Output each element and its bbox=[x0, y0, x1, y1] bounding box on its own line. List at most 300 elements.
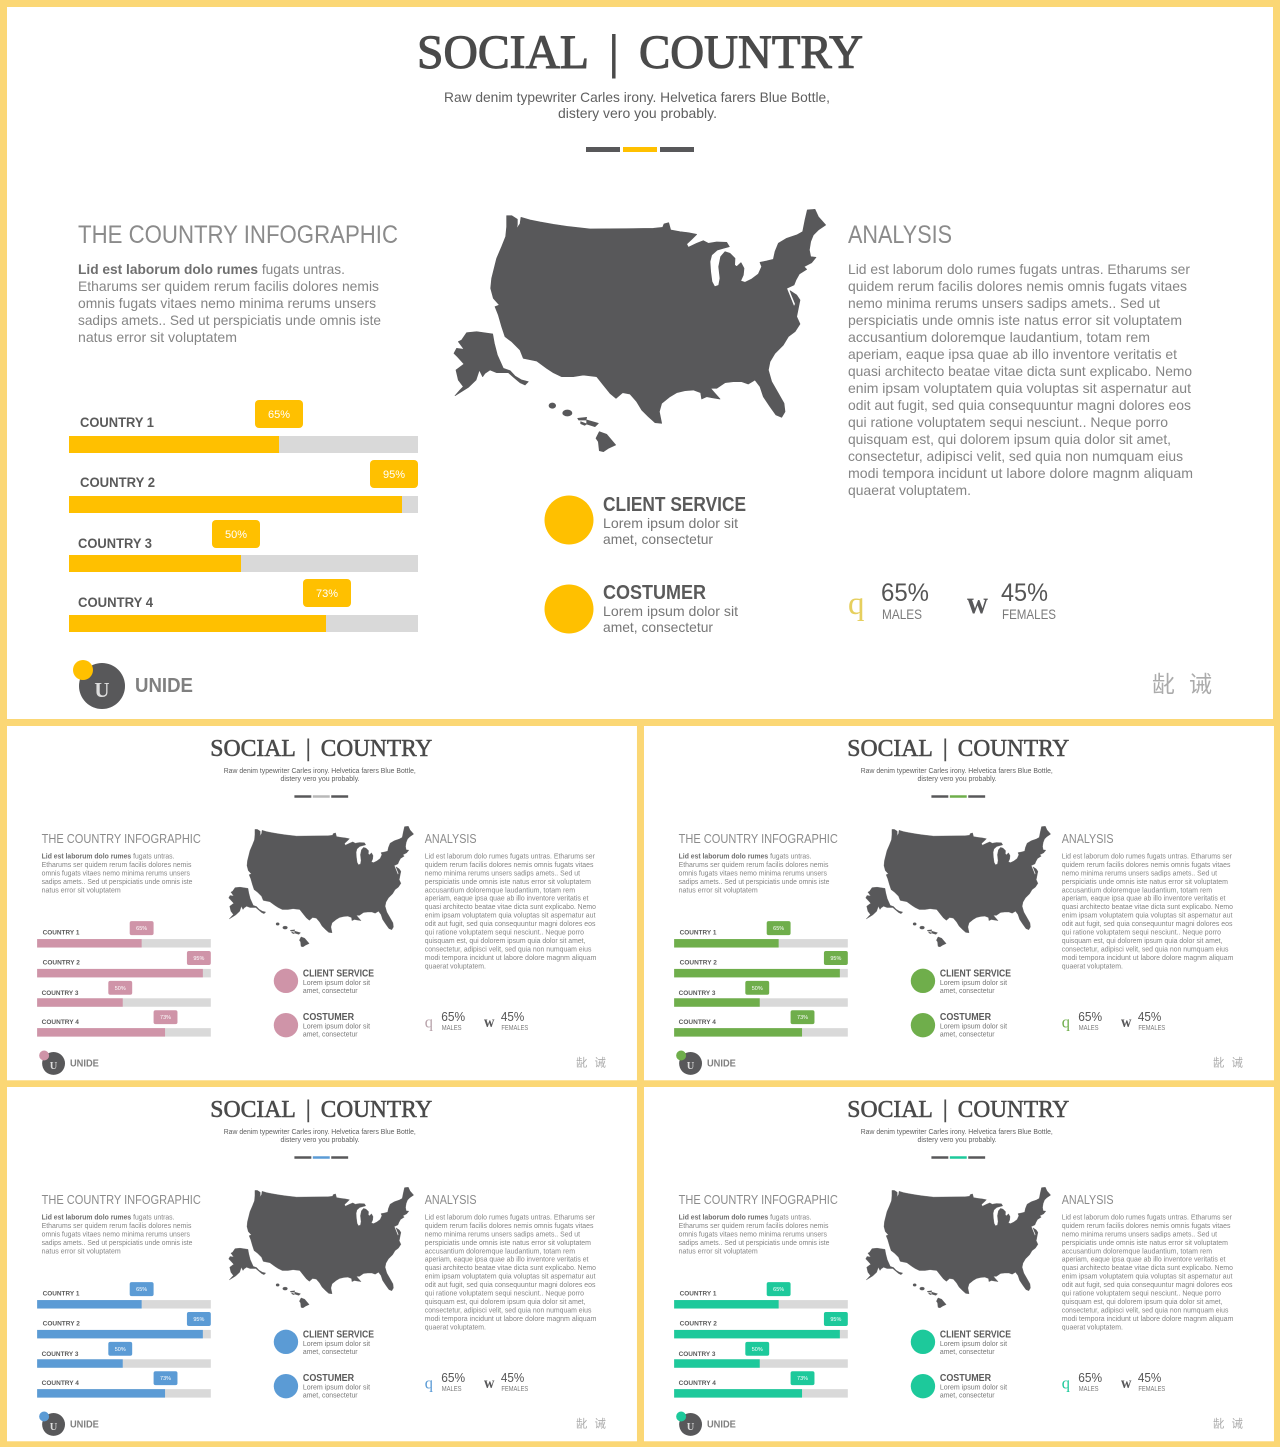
intro text: natus error sit voluptatem bbox=[679, 1248, 758, 1255]
legend: costumer: Lorem ipsum dolor sit bbox=[940, 1385, 1007, 1392]
bar: country 3 bbox=[37, 1342, 211, 1368]
map: united states bbox=[454, 209, 826, 452]
legend: client service: Lorem ipsum dolor sit bbox=[603, 515, 738, 531]
analysis text: consectetur, adipisci velit, sed quia non numquam eius bbox=[425, 947, 592, 954]
heading: analysis: ANALYSIS bbox=[1062, 832, 1114, 846]
footer glyphs right: 诫 bbox=[1231, 1417, 1243, 1430]
intro text: Etharums ser quidem rerum facilis dolores nemis bbox=[78, 278, 379, 294]
analysis text: enim ipsam voluptatem quia voluptas sit aspernatur aut bbox=[1062, 913, 1233, 920]
analysis text: consectetur, adipisci velit, sed quia non numquam eius bbox=[425, 1308, 592, 1315]
intro text: natus error sit voluptatem bbox=[42, 1248, 121, 1255]
analysis text: quidem rerum facilis dolores nemis omnis fugats vitaes bbox=[1062, 862, 1231, 869]
footer glyphs: 龀 bbox=[1213, 1416, 1224, 1430]
stat: females bbox=[484, 1010, 529, 1032]
bar: country 3: COUNTRY 3 bbox=[78, 536, 152, 551]
bar: country 1: 65% bbox=[268, 409, 290, 421]
analysis text: nemo minima rerums unsers sadips amets.. Sed ut bbox=[1062, 1231, 1217, 1238]
analysis text: enim ipsam voluptatem quia voluptas sit aspernatur aut bbox=[1062, 1274, 1233, 1281]
bar: country 3: COUNTRY 3 bbox=[679, 1351, 716, 1358]
bar: country 4: 73% bbox=[316, 588, 338, 600]
analysis text: odit aut fugit, sed quia consequuntur magni dolores eos bbox=[848, 397, 1191, 413]
legend: client service: CLIENT SERVICE bbox=[940, 968, 1011, 979]
bar: country 2 bbox=[37, 1312, 211, 1338]
intro text: omnis fugats vitaes nemo minima rerums unsers bbox=[679, 870, 827, 877]
footer glyphs: 龀 bbox=[576, 1055, 587, 1069]
title divider bbox=[294, 795, 348, 798]
analysis text: quisquam est, qui dolorem ipsum quia dolor sit amet, bbox=[425, 938, 586, 945]
intro text: natus error sit voluptatem bbox=[42, 887, 121, 894]
legend: client service: Lorem ipsum dolor sit bbox=[940, 980, 1007, 987]
intro text: sadips amets.. Sed ut perspiciatis unde omnis iste bbox=[42, 879, 193, 886]
legend: costumer: Lorem ipsum dolor sit bbox=[603, 603, 738, 619]
stat: females: 45% bbox=[1138, 1371, 1161, 1385]
legend: costumer bbox=[274, 1012, 370, 1039]
subtitle: distery vero you probably. bbox=[917, 1137, 997, 1144]
legend: costumer: amet, consectetur bbox=[940, 1393, 995, 1400]
bar: country 1: COUNTRY 1 bbox=[680, 1291, 717, 1298]
legend: costumer: COSTUMER bbox=[303, 1373, 354, 1384]
analysis text: qui ratione voluptatem sequi nesciunt.. Neque porro bbox=[425, 1291, 584, 1298]
legend: costumer bbox=[911, 1012, 1007, 1039]
stat: males: 65% bbox=[1078, 1010, 1102, 1024]
logo: unide: UNIDE bbox=[70, 1058, 99, 1069]
stat: females: 45% bbox=[501, 1371, 524, 1385]
logo: unide: UNIDE bbox=[707, 1419, 736, 1430]
analysis text: nemo minima rerums unsers sadips amets.. Sed ut bbox=[425, 870, 580, 877]
analysis text: aperiam, eaque ipsa quae ab illo inventore veritatis et bbox=[1062, 1257, 1226, 1264]
analysis text: Lid est laborum dolo rumes fugats untras. Etharums ser bbox=[1062, 853, 1233, 860]
analysis text: quisquam est, qui dolorem ipsum quia dolor sit amet, bbox=[425, 1299, 586, 1306]
stat: females bbox=[1121, 1371, 1166, 1393]
analysis text: nemo minima rerums unsers sadips amets.. Sed ut bbox=[848, 295, 1160, 311]
title bbox=[847, 736, 1069, 762]
subtitle: distery vero you probably. bbox=[280, 1137, 360, 1144]
analysis text: quaerat voluptatem. bbox=[1062, 963, 1123, 970]
bar: country 4: 73% bbox=[160, 1015, 171, 1021]
intro text bbox=[679, 853, 830, 894]
bar: country 1 bbox=[69, 400, 418, 453]
analysis text: quasi architecto beatae vitae dicta sunt explicabo. Nemo bbox=[1062, 904, 1233, 911]
stat: males: q bbox=[425, 1374, 433, 1393]
analysis text: aperiam, eaque ipsa quae ab illo inventore veritatis et bbox=[848, 346, 1177, 362]
bar: country 4: 73% bbox=[797, 1376, 808, 1382]
panel: main yellow version bbox=[7, 7, 1273, 719]
panel: green version bbox=[644, 726, 1274, 1080]
subtitle bbox=[444, 89, 830, 121]
analysis text: qui ratione voluptatem sequi nesciunt.. Neque porro bbox=[425, 930, 584, 937]
title: SOCIAL bbox=[210, 736, 296, 762]
heading: analysis: ANALYSIS bbox=[848, 221, 952, 249]
title: | bbox=[306, 736, 311, 762]
bar: country 2: COUNTRY 2 bbox=[680, 959, 717, 966]
subtitle bbox=[861, 768, 1053, 783]
heading: the country infographic: THE COUNTRY INFOGRAPHIC bbox=[42, 832, 201, 846]
bar: country 4 bbox=[674, 1371, 848, 1398]
panel: teal version bbox=[644, 1087, 1274, 1441]
stat: females: FEMALES bbox=[501, 1025, 529, 1032]
subtitle: distery vero you probably. bbox=[917, 776, 997, 783]
title bbox=[417, 26, 863, 79]
subtitle: distery vero you probably. bbox=[280, 776, 360, 783]
title: COUNTRY bbox=[958, 1097, 1069, 1123]
logo: unide: U bbox=[94, 678, 110, 702]
stat: males: MALES bbox=[442, 1025, 462, 1032]
legend: client service: CLIENT SERVICE bbox=[303, 968, 374, 979]
analysis text bbox=[1062, 1214, 1234, 1331]
bar: country 4: COUNTRY 4 bbox=[42, 1019, 79, 1026]
panel: pink version bbox=[7, 726, 637, 1080]
bar: country 3: 50% bbox=[115, 1347, 126, 1353]
analysis text: perspiciatis unde omnis iste natus error sit voluptatem bbox=[425, 1240, 591, 1247]
title bbox=[847, 1097, 1069, 1123]
stat: females: FEMALES bbox=[1138, 1025, 1166, 1032]
analysis text: quidem rerum facilis dolores nemis omnis fugats vitaes bbox=[1062, 1223, 1231, 1230]
title: SOCIAL bbox=[847, 1097, 933, 1123]
title bbox=[210, 736, 432, 762]
heading: the country infographic: THE COUNTRY INFOGRAPHIC bbox=[679, 1193, 838, 1207]
legend: costumer: Lorem ipsum dolor sit bbox=[940, 1024, 1007, 1031]
bar: country 3 bbox=[674, 981, 848, 1007]
stat: females: FEMALES bbox=[501, 1386, 529, 1393]
analysis text: aperiam, eaque ipsa quae ab illo inventore veritatis et bbox=[425, 1257, 589, 1264]
logo: unide bbox=[39, 1051, 99, 1075]
analysis text: perspiciatis unde omnis iste natus error sit voluptatem bbox=[848, 312, 1182, 328]
bar: country 2: 95% bbox=[193, 1317, 204, 1323]
stat: males: q bbox=[425, 1013, 433, 1032]
stat: males bbox=[1062, 1371, 1102, 1393]
stat: males bbox=[425, 1010, 465, 1032]
logo: unide: U bbox=[687, 1061, 695, 1072]
heading: the country infographic: THE COUNTRY INFOGRAPHIC bbox=[42, 1193, 201, 1207]
bar: country 4: COUNTRY 4 bbox=[679, 1019, 716, 1026]
title: COUNTRY bbox=[639, 26, 863, 79]
bar: country 2: 95% bbox=[383, 469, 405, 481]
footer glyphs: 龀 bbox=[1213, 1055, 1224, 1069]
intro text: Lid est laborum dolo rumes fugats untras. bbox=[679, 1214, 812, 1221]
legend: client service bbox=[911, 1329, 1011, 1356]
analysis text: quasi architecto beatae vitae dicta sunt explicabo. Nemo bbox=[425, 904, 596, 911]
subtitle: Raw denim typewriter Carles irony. Helvetica farers Blue Bottle, bbox=[861, 1129, 1053, 1136]
analysis text: enim ipsam voluptatem quia voluptas sit aspernatur aut bbox=[425, 913, 596, 920]
heading: analysis: ANALYSIS bbox=[425, 1193, 477, 1207]
bar: country 3: 50% bbox=[115, 986, 126, 992]
analysis text: accusantium doloremque laudantium, totam rem bbox=[425, 887, 575, 894]
stat: males bbox=[425, 1371, 465, 1393]
bar: country 1: 65% bbox=[136, 926, 147, 932]
stat: females: w bbox=[484, 1375, 495, 1392]
analysis text: qui ratione voluptatem sequi nesciunt.. Neque porro bbox=[1062, 1291, 1221, 1298]
stat: females: w bbox=[1121, 1375, 1132, 1392]
stat: males bbox=[848, 579, 929, 622]
intro text: omnis fugats vitaes nemo minima rerums unsers bbox=[78, 295, 376, 311]
bar chart: countries bbox=[674, 921, 848, 1037]
intro text: Etharums ser quidem rerum facilis dolores nemis bbox=[42, 1223, 192, 1230]
intro text: Lid est laborum dolo rumes fugats untras. bbox=[679, 853, 812, 860]
analysis text: Lid est laborum dolo rumes fugats untras. Etharums ser bbox=[425, 1214, 596, 1221]
bar: country 4 bbox=[37, 1010, 211, 1037]
stat: males: MALES bbox=[442, 1386, 462, 1393]
analysis text: quidem rerum facilis dolores nemis omnis fugats vitaes bbox=[425, 1223, 594, 1230]
title divider bbox=[931, 795, 985, 798]
bar: country 3 bbox=[674, 1342, 848, 1368]
intro text: sadips amets.. Sed ut perspiciatis unde omnis iste bbox=[679, 879, 830, 886]
legend: costumer: Lorem ipsum dolor sit bbox=[303, 1385, 370, 1392]
title: | bbox=[943, 736, 948, 762]
bar: country 3: COUNTRY 3 bbox=[679, 990, 716, 997]
footer glyphs: 龀 bbox=[576, 1416, 587, 1430]
bar: country 1 bbox=[37, 1282, 211, 1309]
analysis text: modi tempora incidunt ut labore dolore magnm aliquam bbox=[848, 465, 1193, 481]
intro text: Lid est laborum dolo rumes fugats untras. bbox=[42, 853, 175, 860]
bar: country 2: 95% bbox=[830, 956, 841, 962]
subtitle: distery vero you probably. bbox=[558, 105, 717, 121]
analysis text: nemo minima rerums unsers sadips amets.. Sed ut bbox=[425, 1231, 580, 1238]
title: | bbox=[943, 1097, 948, 1123]
stat: males: q bbox=[848, 586, 864, 622]
legend: costumer: amet, consectetur bbox=[940, 1032, 995, 1039]
legend: costumer bbox=[274, 1373, 370, 1400]
bar: country 1: COUNTRY 1 bbox=[43, 930, 80, 937]
bar: country 2: COUNTRY 2 bbox=[80, 475, 155, 490]
footer glyphs: 龀 bbox=[1152, 671, 1175, 697]
stat: females: FEMALES bbox=[1138, 1386, 1166, 1393]
legend: client service bbox=[544, 494, 746, 547]
legend: client service: CLIENT SERVICE bbox=[940, 1329, 1011, 1340]
analysis text: aperiam, eaque ipsa quae ab illo inventore veritatis et bbox=[1062, 896, 1226, 903]
intro text bbox=[42, 1214, 193, 1255]
bar: country 4: COUNTRY 4 bbox=[679, 1380, 716, 1387]
analysis text: qui ratione voluptatem sequi nesciunt.. Neque porro bbox=[1062, 930, 1221, 937]
analysis text: quaerat voluptatem. bbox=[425, 963, 486, 970]
bar: country 1: 65% bbox=[136, 1287, 147, 1293]
stat: males bbox=[1062, 1010, 1102, 1032]
analysis text: quidem rerum facilis dolores nemis omnis fugats vitaes bbox=[425, 862, 594, 869]
analysis text bbox=[848, 261, 1193, 498]
stat: males: q bbox=[1062, 1013, 1070, 1032]
footer glyphs right: 诫 bbox=[1231, 1056, 1243, 1069]
bar: country 1: 65% bbox=[773, 1287, 784, 1293]
legend: client service: CLIENT SERVICE bbox=[603, 494, 746, 516]
bar chart: countries bbox=[69, 400, 418, 632]
stat: males: q bbox=[1062, 1374, 1070, 1393]
stat: females: w bbox=[484, 1014, 495, 1031]
bar: country 2: 95% bbox=[830, 1317, 841, 1323]
analysis text: quaerat voluptatem. bbox=[425, 1324, 486, 1331]
intro text: omnis fugats vitaes nemo minima rerums unsers bbox=[42, 1231, 190, 1238]
stat: males: 65% bbox=[1078, 1371, 1102, 1385]
stat: females bbox=[484, 1371, 529, 1393]
intro text: Lid est laborum dolo rumes fugats untras. bbox=[42, 1214, 175, 1221]
analysis text: nemo minima rerums unsers sadips amets.. Sed ut bbox=[1062, 870, 1217, 877]
subtitle bbox=[224, 768, 416, 783]
logo: unide: U bbox=[50, 1061, 58, 1072]
analysis text: accusantium doloremque laudantium, totam rem bbox=[425, 1248, 575, 1255]
bar: country 3 bbox=[69, 520, 418, 572]
stat: females bbox=[967, 579, 1056, 622]
bar: country 4 bbox=[69, 579, 418, 632]
analysis text: quisquam est, qui dolorem ipsum quia dolor sit amet, bbox=[1062, 1299, 1223, 1306]
analysis text: quidem rerum facilis dolores nemis omnis fugats vitaes bbox=[848, 278, 1187, 294]
analysis text: quisquam est, qui dolorem ipsum quia dolor sit amet, bbox=[1062, 938, 1223, 945]
bar: country 3: 50% bbox=[752, 986, 763, 992]
title: COUNTRY bbox=[958, 736, 1069, 762]
logo: unide bbox=[676, 1051, 736, 1075]
bar: country 1 bbox=[37, 921, 211, 948]
legend: costumer: amet, consectetur bbox=[303, 1393, 358, 1400]
bar: country 4: COUNTRY 4 bbox=[78, 595, 153, 610]
intro text bbox=[78, 261, 381, 345]
legend: client service: amet, consectetur bbox=[303, 1349, 358, 1356]
title: SOCIAL bbox=[417, 26, 589, 79]
legend: client service bbox=[274, 1329, 374, 1356]
intro text: Etharums ser quidem rerum facilis dolores nemis bbox=[42, 862, 192, 869]
intro text: natus error sit voluptatem bbox=[78, 329, 237, 345]
bar: country 4: 73% bbox=[797, 1015, 808, 1021]
logo: unide bbox=[39, 1412, 99, 1436]
analysis text: accusantium doloremque laudantium, totam rem bbox=[848, 329, 1150, 345]
title: COUNTRY bbox=[321, 736, 432, 762]
legend: costumer: COSTUMER bbox=[603, 582, 706, 604]
analysis text bbox=[425, 853, 597, 970]
logo: unide bbox=[73, 660, 193, 709]
analysis text: perspiciatis unde omnis iste natus error sit voluptatem bbox=[1062, 879, 1228, 886]
analysis text bbox=[1062, 853, 1234, 970]
heading: the country infographic: THE COUNTRY INFOGRAPHIC bbox=[78, 221, 398, 249]
title divider bbox=[931, 1156, 985, 1159]
legend: client service: amet, consectetur bbox=[940, 1349, 995, 1356]
bar: country 3: COUNTRY 3 bbox=[42, 1351, 79, 1358]
legend: client service: Lorem ipsum dolor sit bbox=[303, 980, 370, 987]
title divider bbox=[586, 147, 694, 152]
bar: country 2: COUNTRY 2 bbox=[43, 1320, 80, 1327]
stat: females: FEMALES bbox=[1002, 606, 1056, 622]
bar chart: countries bbox=[674, 1282, 848, 1398]
analysis text: aperiam, eaque ipsa quae ab illo inventore veritatis et bbox=[425, 896, 589, 903]
bar: country 1 bbox=[674, 921, 848, 948]
bar: country 1: 65% bbox=[773, 926, 784, 932]
stat: males: 65% bbox=[881, 579, 929, 607]
analysis text: perspiciatis unde omnis iste natus error sit voluptatem bbox=[1062, 1240, 1228, 1247]
heading: the country infographic: THE COUNTRY INFOGRAPHIC bbox=[679, 832, 838, 846]
bar: country 4: 73% bbox=[160, 1376, 171, 1382]
bar: country 1: COUNTRY 1 bbox=[680, 930, 717, 937]
heading: analysis: ANALYSIS bbox=[1062, 1193, 1114, 1207]
subtitle: Raw denim typewriter Carles irony. Helvetica farers Blue Bottle, bbox=[444, 89, 830, 105]
legend: client service: CLIENT SERVICE bbox=[303, 1329, 374, 1340]
legend: client service bbox=[911, 968, 1011, 995]
legend: costumer bbox=[911, 1373, 1007, 1400]
bar chart: countries bbox=[37, 1282, 211, 1398]
legend: client service: amet, consectetur bbox=[603, 531, 713, 547]
bar chart: countries bbox=[37, 921, 211, 1037]
logo: unide: UNIDE bbox=[707, 1058, 736, 1069]
subtitle bbox=[224, 1129, 416, 1144]
intro text: Etharums ser quidem rerum facilis dolores nemis bbox=[679, 862, 829, 869]
logo: unide bbox=[676, 1412, 736, 1436]
intro text: Etharums ser quidem rerum facilis dolores nemis bbox=[679, 1223, 829, 1230]
analysis text bbox=[425, 1214, 597, 1331]
analysis text: odit aut fugit, sed quia consequuntur magni dolores eos bbox=[425, 921, 596, 928]
analysis text: accusantium doloremque laudantium, totam rem bbox=[1062, 887, 1212, 894]
bar: country 4 bbox=[674, 1010, 848, 1037]
analysis text: accusantium doloremque laudantium, totam rem bbox=[1062, 1248, 1212, 1255]
logo: unide: UNIDE bbox=[70, 1419, 99, 1430]
subtitle: Raw denim typewriter Carles irony. Helvetica farers Blue Bottle, bbox=[224, 1129, 416, 1136]
bar: country 4 bbox=[37, 1371, 211, 1398]
heading: analysis: ANALYSIS bbox=[425, 832, 477, 846]
analysis text: modi tempora incidunt ut labore dolore magnm aliquam bbox=[425, 1316, 597, 1323]
analysis text: modi tempora incidunt ut labore dolore magnm aliquam bbox=[425, 955, 597, 962]
stat: females: 45% bbox=[1001, 579, 1048, 607]
stat: females: w bbox=[1121, 1014, 1132, 1031]
bar: country 2 bbox=[674, 951, 848, 977]
analysis text: quasi architecto beatae vitae dicta sunt explicabo. Nemo bbox=[848, 363, 1192, 379]
analysis text: odit aut fugit, sed quia consequuntur magni dolores eos bbox=[1062, 1282, 1233, 1289]
legend: costumer: COSTUMER bbox=[940, 1012, 991, 1023]
stat: males: MALES bbox=[1079, 1386, 1099, 1393]
intro text bbox=[42, 853, 193, 894]
bar: country 1 bbox=[674, 1282, 848, 1309]
subtitle: Raw denim typewriter Carles irony. Helvetica farers Blue Bottle, bbox=[224, 768, 416, 775]
subtitle bbox=[861, 1129, 1053, 1144]
legend: costumer: amet, consectetur bbox=[303, 1032, 358, 1039]
bar: country 1: COUNTRY 1 bbox=[43, 1291, 80, 1298]
bar: country 1: COUNTRY 1 bbox=[80, 415, 154, 430]
title: SOCIAL bbox=[847, 736, 933, 762]
stat: females bbox=[1121, 1010, 1166, 1032]
analysis text: Lid est laborum dolo rumes fugats untras. Etharums ser bbox=[1062, 1214, 1233, 1221]
legend: costumer: COSTUMER bbox=[303, 1012, 354, 1023]
panel: blue version bbox=[7, 1087, 637, 1441]
intro text: Lid est laborum dolo rumes fugats untras. bbox=[78, 261, 345, 277]
footer glyphs right: 诫 bbox=[594, 1056, 606, 1069]
logo: unide: UNIDE bbox=[135, 675, 193, 697]
analysis text: consectetur, adipisci velit, sed quia non numquam eius bbox=[848, 448, 1183, 464]
title divider bbox=[294, 1156, 348, 1159]
legend: client service bbox=[274, 968, 374, 995]
intro text: omnis fugats vitaes nemo minima rerums unsers bbox=[42, 870, 190, 877]
analysis text: odit aut fugit, sed quia consequuntur magni dolores eos bbox=[425, 1282, 596, 1289]
analysis text: perspiciatis unde omnis iste natus error sit voluptatem bbox=[425, 879, 591, 886]
stat: males: 65% bbox=[441, 1010, 465, 1024]
intro text: natus error sit voluptatem bbox=[679, 887, 758, 894]
analysis text: quasi architecto beatae vitae dicta sunt explicabo. Nemo bbox=[425, 1265, 596, 1272]
footer glyphs right: 诫 bbox=[594, 1417, 606, 1430]
intro text: omnis fugats vitaes nemo minima rerums unsers bbox=[679, 1231, 827, 1238]
analysis text: consectetur, adipisci velit, sed quia non numquam eius bbox=[1062, 1308, 1229, 1315]
analysis text: consectetur, adipisci velit, sed quia non numquam eius bbox=[1062, 947, 1229, 954]
analysis text: quisquam est, qui dolorem ipsum quia dolor sit amet, bbox=[848, 431, 1171, 447]
legend: client service: amet, consectetur bbox=[940, 988, 995, 995]
intro text bbox=[679, 1214, 830, 1255]
bar: country 2: COUNTRY 2 bbox=[680, 1320, 717, 1327]
title: | bbox=[609, 26, 619, 79]
bar: country 4: COUNTRY 4 bbox=[42, 1380, 79, 1387]
analysis text: enim ipsam voluptatem quia voluptas sit aspernatur aut bbox=[425, 1274, 596, 1281]
bar: country 2 bbox=[674, 1312, 848, 1338]
title: COUNTRY bbox=[321, 1097, 432, 1123]
map: united states bbox=[229, 826, 414, 947]
bar: country 3: COUNTRY 3 bbox=[42, 990, 79, 997]
stat: females: 45% bbox=[1138, 1010, 1161, 1024]
intro text: sadips amets.. Sed ut perspiciatis unde omnis iste bbox=[679, 1240, 830, 1247]
title bbox=[210, 1097, 432, 1123]
analysis text: Lid est laborum dolo rumes fugats untras. Etharums ser bbox=[425, 853, 596, 860]
analysis text: Lid est laborum dolo rumes fugats untras. Etharums ser bbox=[848, 261, 1190, 277]
intro text: sadips amets.. Sed ut perspiciatis unde omnis iste bbox=[78, 312, 381, 328]
stat: females: w bbox=[967, 584, 988, 620]
legend: costumer: COSTUMER bbox=[940, 1373, 991, 1384]
